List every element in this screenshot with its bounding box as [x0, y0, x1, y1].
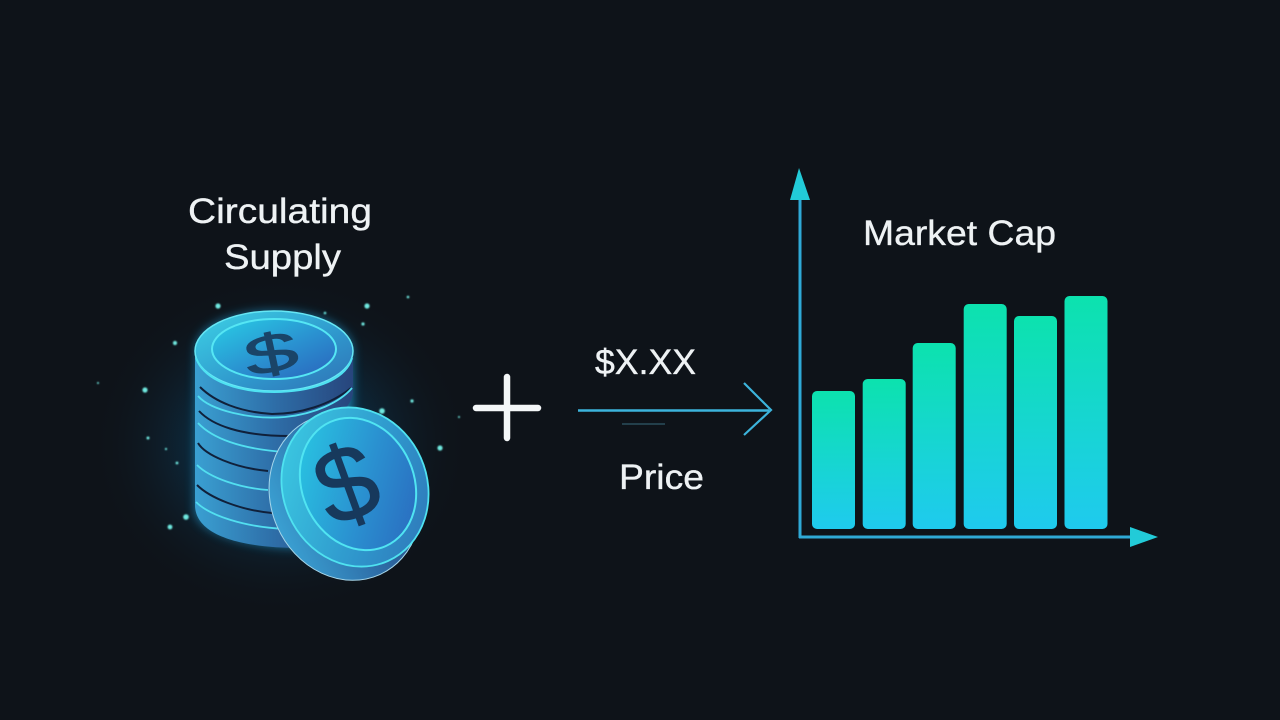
- heading: circulating supply: Supply: [224, 238, 342, 277]
- icon: front coin: [243, 384, 454, 605]
- top coin: $: [239, 318, 304, 389]
- icon: sparkles: [97, 296, 460, 529]
- axes: [790, 168, 1158, 547]
- coin layer edges: [196, 387, 352, 529]
- stack halo: [195, 311, 353, 548]
- bars: [812, 296, 1108, 529]
- icon: plus sign: [476, 377, 538, 438]
- stack body: [195, 311, 353, 548]
- icon: front coin: $: [299, 419, 395, 550]
- label: price: Price: [619, 458, 704, 497]
- icon: coin glow: [90, 275, 470, 615]
- top coin: [195, 311, 353, 392]
- icon: coin stack: [195, 311, 353, 548]
- arrow: to market cap: [578, 383, 771, 435]
- heading: circulating supply: Circulating: [188, 192, 372, 231]
- label: price value: $X.XX: [595, 343, 696, 382]
- heading: market cap: Market Cap: [863, 214, 1056, 253]
- chart: market cap bars: [790, 168, 1158, 547]
- heading: circulating supply: [188, 192, 372, 277]
